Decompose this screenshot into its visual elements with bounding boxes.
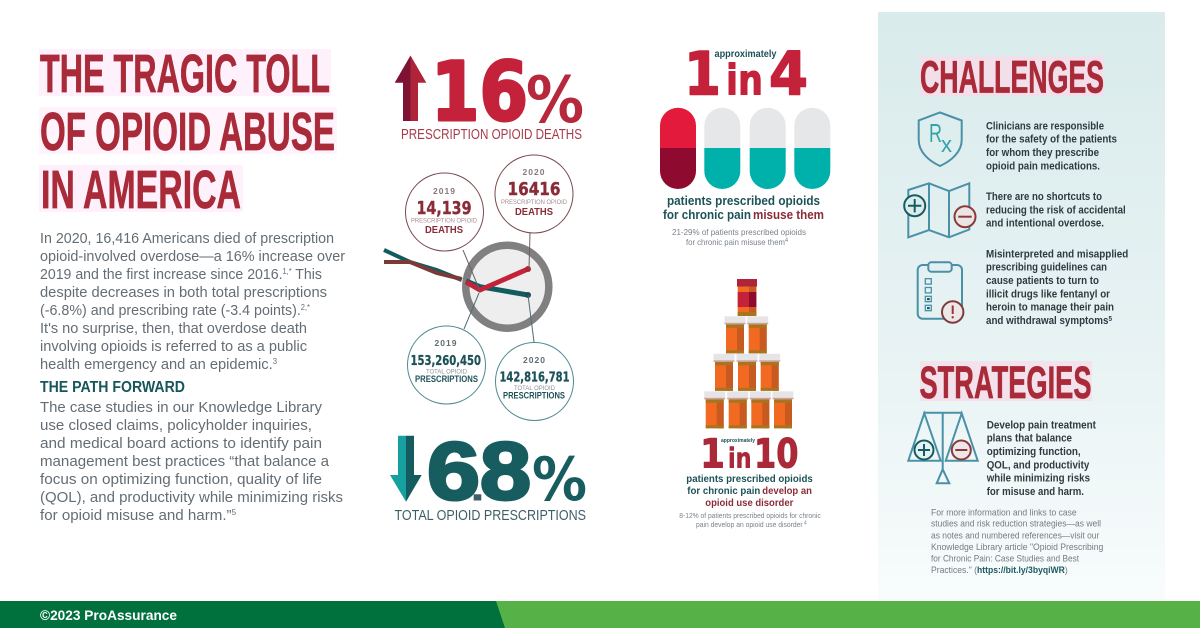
icon: Rx shield: x [941, 132, 952, 157]
stat label: PRESCRIPTION OPIOID DEATHS [401, 127, 582, 143]
icon: Rx shield: R [929, 118, 942, 148]
top red bottle [737, 279, 757, 316]
text: misuse caption: for chronic pain [663, 208, 751, 222]
title: OF OPIOID ABUSE [40, 102, 335, 162]
callout: 2020 prescriptions: 2020 [523, 355, 546, 365]
pill graphic: 1 of 4 highlighted [660, 108, 830, 189]
callout: 2020 deaths: 16416 [508, 180, 560, 200]
stat label: TOTAL OPIOID PRESCRIPTIONS [394, 508, 586, 524]
text: more information note: as notes and numbered references—visit our [931, 530, 1100, 541]
percent sign: % [532, 445, 587, 515]
icon: balance scale [908, 413, 978, 483]
stat: 1 in 10: in [728, 442, 752, 474]
intro text block: 2019 and the first increase since 2016. [40, 266, 301, 283]
icon: map with plus and minus [904, 183, 976, 237]
intro text block: health emergency and an epidemic. [40, 356, 281, 373]
text: more information note: Knowledge Library article "Opioid Prescribing [931, 542, 1103, 553]
figure 6.8: 8 [480, 426, 531, 517]
text: challenge one: Clinicians are responsible [986, 120, 1104, 132]
text: challenge one [986, 120, 1117, 172]
intro text block: 3 [273, 357, 278, 366]
heading: strategies [920, 357, 1092, 408]
text: challenge three: prescribing guidelines can [986, 262, 1107, 274]
connector lines [463, 233, 534, 342]
heading: challenges [920, 52, 1104, 102]
text: challenge two [986, 191, 1126, 230]
path forward text block: and medical board actions to identify pain [40, 435, 322, 452]
heading: the path forward: THE PATH FORWARD [40, 379, 185, 396]
text: strategy: for misuse and harm. [987, 486, 1084, 498]
text: more information note: Practices." (https://bit.ly/3byqiWR) [931, 565, 1068, 576]
intro text block: (-6.8%) and prescribing rate (-3.4 points). [40, 302, 318, 319]
text: misuse source note: 21-29% of patients prescribed opioids [672, 227, 806, 237]
intro text block: It's no surprise, then, that overdose death [40, 320, 307, 337]
intro text block: In 2020, 16,416 Americans died of prescription [40, 230, 334, 247]
text: strategy: while minimizing risks [986, 473, 1090, 485]
text: challenge three: heroin to manage their pain [986, 302, 1114, 314]
stat: 1 in 10: approximately [721, 438, 756, 444]
text: more information note [931, 507, 1103, 576]
text: challenge one: for the safety of the patients [986, 134, 1117, 146]
path forward text block [40, 399, 343, 524]
text: challenge three: and withdrawal symptoms [986, 315, 1121, 327]
text: more information note: For more information and links to case [931, 507, 1077, 518]
stat: 1 in 4: approximately [714, 48, 777, 60]
callout: 2020 deaths: DEATHS [515, 207, 553, 218]
callout: 2020 prescriptions: 142,816,781 [500, 370, 570, 386]
intro text block: despite decreases in both total prescriptions [40, 284, 327, 301]
figure 6.8 [427, 426, 531, 517]
stat: 1 in 10: 10 [754, 432, 798, 478]
callout: 2019 deaths: PRESCRIPTION OPIOID [411, 218, 477, 224]
text: misuse source note [672, 227, 806, 247]
panel: challenges and strategies [878, 12, 1165, 600]
copyright: ©2023 ProAssurance [40, 607, 177, 623]
text: disorder caption: patients prescribed opioids [686, 473, 813, 485]
title: THE TRAGIC TOLL [40, 44, 330, 104]
callout: 2019 deaths: 2019 [433, 186, 456, 196]
text: misuse source note: for chronic pain misuse them [686, 237, 795, 247]
text: challenge two: reducing the risk of accidental [986, 204, 1126, 216]
text: challenge three [986, 248, 1128, 327]
stat: 6.8% total opioid prescriptions [390, 426, 587, 524]
figure 6.8: 6 [427, 426, 480, 517]
text: strategy: plans that balance [987, 433, 1072, 445]
path forward text block: The case studies in our Knowledge Library [40, 399, 322, 416]
percent sign: % [526, 64, 584, 138]
callout: 2019 prescriptions: 2019 [435, 338, 457, 348]
intro text block: 1,* [283, 267, 292, 276]
callout: 2020 deaths: PRESCRIPTION OPIOID [501, 199, 567, 206]
callout: 2020 prescriptions: TOTAL OPIOID [514, 385, 555, 392]
icon: Rx shield [919, 112, 962, 166]
path forward text block: use closed claims, policyholder inquiries, [40, 417, 312, 434]
footer bar [0, 601, 1200, 628]
callout: 2020 prescriptions: PRESCRIPTIONS [503, 390, 565, 400]
stat: 1 in 4: in [726, 56, 763, 104]
icon: down arrow [390, 436, 422, 502]
callout: 2019 prescriptions: TOTAL OPIOID [426, 368, 467, 376]
intro text block: 2,* [301, 303, 310, 312]
text: disorder source note: pain develop an opioid use disorder [696, 522, 807, 529]
text: challenge two: and intentional overdose. [986, 218, 1104, 230]
path forward text block: focus on optimizing function, quality of life [40, 471, 322, 488]
text: misuse caption: patients prescribed opioids [667, 194, 820, 208]
text: strategy [986, 419, 1096, 498]
text: challenge three: cause patients to turn to [986, 275, 1099, 287]
stat: 1 in 10: 1 [700, 432, 725, 478]
text: challenge three: illicit drugs like fentanyl or [986, 288, 1111, 300]
icon: up arrow [395, 56, 426, 121]
text: misuse source note: 4 [785, 238, 789, 244]
text: more information note: studies and risk reduction strategies—as well [931, 519, 1101, 530]
stat: 16% prescription opioid deaths [395, 46, 584, 143]
stat: 1 in 4: 4 [769, 40, 808, 110]
callout: 2019 deaths: DEATHS [425, 225, 463, 236]
text: disorder source note: 8-12% of patients prescribed opioids for chronic [679, 513, 821, 520]
text: disorder caption: opioid use disorder [705, 497, 793, 509]
text: challenge three: Misinterpreted and misapplied [986, 248, 1128, 260]
path forward text block: 5 [232, 508, 237, 517]
title: IN AMERICA [41, 160, 241, 220]
heading: strategies: STRATEGIES [920, 357, 1092, 408]
stat: 1 in 4: 1 [684, 40, 721, 110]
stat: 1 in 4 [684, 40, 808, 110]
icon: clipboard checklist with alert [918, 262, 963, 323]
intro text block: opioid-involved overdose—a 16% increase over [40, 248, 345, 265]
path forward text block: management best practices “that balance a [40, 453, 330, 470]
text: challenge two: There are no shortcuts to [986, 191, 1102, 203]
path forward text block: (QOL), and productivity while minimizing risks [40, 489, 343, 506]
callout: 2019 prescriptions [408, 326, 486, 404]
figure 6.8: . [470, 462, 485, 510]
callout: 2020 deaths [495, 155, 573, 233]
intro text block: This [292, 266, 322, 283]
text: more information note: for Chronic Pain: Case Studies and Best [931, 553, 1079, 564]
text: misuse caption [663, 194, 824, 222]
stat: 1 in 10 [700, 432, 798, 478]
text: misuse caption: misuse them [753, 208, 824, 222]
callout: 2019 prescriptions: 153,260,450 [410, 353, 481, 369]
title [39, 44, 337, 220]
text: strategy: QOL, and productivity [987, 459, 1089, 471]
text: challenge one: opioid pain medications. [986, 160, 1100, 172]
intro text block [40, 230, 345, 373]
intro text block: involving opioids is referred to as a public [40, 338, 307, 355]
text: challenge three: 5 [1108, 316, 1112, 323]
chart: magnified trend lines [384, 245, 549, 328]
callout: 2020 deaths: 2020 [523, 167, 545, 177]
callout: 2019 deaths: 14,139 [416, 199, 472, 219]
text: disorder caption: for chronic pain [687, 485, 760, 497]
figure 16: 16 [431, 46, 528, 140]
text: disorder caption: develop an [762, 485, 812, 497]
text: strategy: Develop pain treatment [987, 419, 1096, 431]
callout: 2019 prescriptions: PRESCRIPTIONS [415, 374, 478, 384]
text: challenge one: for whom they prescribe [986, 147, 1099, 159]
callout: 2019 deaths [406, 173, 484, 251]
text: strategy: optimizing function, [987, 446, 1081, 458]
callout: 2020 prescriptions [496, 342, 574, 420]
text: disorder source note: 4 [803, 520, 807, 526]
text: disorder caption [686, 473, 813, 509]
text: disorder source note [679, 513, 821, 529]
path forward text block: for opioid misuse and harm.” [40, 507, 232, 524]
bottle pyramid graphic [704, 279, 794, 428]
